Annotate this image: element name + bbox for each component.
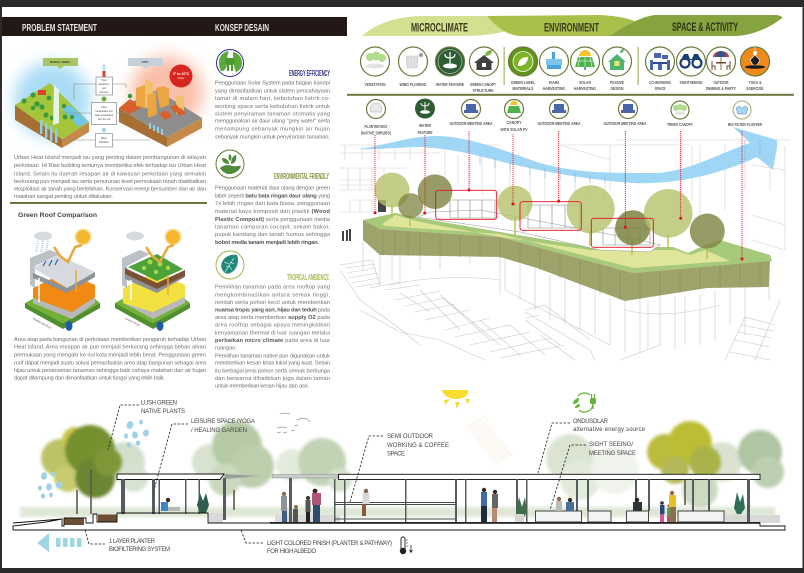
- icon: canopy solar: [504, 100, 524, 118]
- banner: environment: ENVIRONMENT: [544, 20, 599, 34]
- annotation labels: TREES CANOPY: [667, 122, 693, 127]
- text block: environmental friendly: Plastic Composit) serta penggunaan media: [215, 217, 331, 223]
- icon labels: DINNING & PARTY: [706, 86, 736, 91]
- illustration: traditional roof: [25, 230, 100, 331]
- red temperature badge: hotter: [178, 77, 184, 80]
- icon: planter box: [366, 100, 386, 118]
- text block: tropical ambience: area atap serta memberikan supply O2 pada: [215, 315, 331, 321]
- red temperature badge: 3° to 10°C: [173, 72, 190, 76]
- text block: green roof: dapat ditampung dan dimanfaatkan untuk fungsi yang lebih baik.: [14, 376, 165, 382]
- icon labels: YOGA &: [748, 80, 762, 85]
- process box: heat: [96, 77, 112, 95]
- city label: CITY: [142, 60, 148, 64]
- illustration: green roof: Green Roof: [125, 316, 140, 327]
- text block: environmental friendly: 7x lebih ringan dari bata biasa, penggunaan: [215, 201, 330, 207]
- process box: heat: and: [102, 88, 107, 90]
- label: lush green native plants: [141, 400, 185, 415]
- icon labels: [364, 80, 764, 93]
- perspective drawing: rooftop: [340, 127, 790, 360]
- text block: energy efficiency: sistem penyiraman tanaman otomatis yang: [215, 111, 330, 117]
- icon labels: CO-WORKING: [649, 80, 671, 85]
- banner: microclimate: [362, 16, 512, 36]
- label: ondusolar: alternative energy source: [573, 427, 646, 433]
- text block: energy efficiency: menampung sebanyak mungkin air hujan: [215, 126, 330, 132]
- icon: co-working space: [646, 47, 674, 76]
- roof facade: [363, 220, 770, 301]
- tree trunks: [77, 470, 685, 514]
- railing: [334, 502, 456, 519]
- text block: energy efficiency: tamar di malam hari, kebutuhan listrik co-: [215, 96, 330, 102]
- illustration: green roof: [115, 230, 190, 331]
- icon labels: GREEN LABEL: [511, 80, 535, 85]
- icon labels: VEGETATION: [364, 82, 386, 87]
- callout points: [374, 188, 744, 260]
- annotation labels: (NATIVE SHRUBS): [361, 130, 391, 136]
- icon labels: PASSIVE: [610, 80, 624, 85]
- rural label: [43, 58, 78, 69]
- icon labels: SIGHTSEEING: [680, 80, 703, 85]
- plaza seating linework: [340, 260, 780, 360]
- text block: tropical ambience: nuansa tropis yang asri, hijau dan teduh pada: [215, 307, 331, 313]
- process box: water: [96, 128, 112, 147]
- icon labels: MATERIALS: [512, 86, 534, 91]
- text block: energy efficiency: [214, 81, 331, 141]
- arrow: water flow: [37, 533, 82, 552]
- city towers: [136, 79, 186, 120]
- icon: big filter planter: [733, 101, 751, 119]
- icon labels: HARVESTING: [543, 86, 565, 91]
- icon: water feature: [415, 98, 435, 118]
- icon row: design features: [360, 47, 770, 85]
- text block: green roof: [14, 337, 207, 382]
- icon: outdoor meeting: [462, 100, 480, 118]
- icon: vegetation: [360, 47, 390, 76]
- text block: environmental friendly: bobot media tanam menjadi lebih ringan.: [215, 240, 319, 246]
- process diagram connectors: [60, 84, 150, 140]
- icon: energy efficiency: [216, 50, 244, 76]
- text block: urban heat island: Island. Selain itu daerah resapan air di kawasan perkotaan yang semakin: [14, 172, 206, 178]
- faded background trees: [105, 421, 784, 508]
- text block: urban heat island: eksploitasi air tanah yang berlebihan. Konservasi energi bersumber dari air dan: [14, 186, 206, 192]
- icon labels: SPACE: [654, 86, 666, 91]
- wind swirls: [43, 259, 58, 266]
- paving: [208, 513, 780, 523]
- text block: environmental friendly: Penggunaan material daur ulang dengan green: [215, 185, 330, 191]
- text block: tropical ambience: itu berbagai jenis pohon serta semak berbunga: [215, 369, 331, 375]
- thermometer: [102, 64, 106, 78]
- process box: heat: Heat: [102, 79, 107, 82]
- icon: passive design: [602, 47, 632, 76]
- icon: yoga and exercise: [740, 47, 770, 76]
- label: lush green native plants: LUSH GREEN: [141, 400, 177, 406]
- label: ondusolar: [573, 419, 646, 433]
- icon: outdoor meeting: [550, 100, 568, 118]
- header band: problem statement and konsep desain: [2, 17, 347, 36]
- text block: urban heat island: berkurang pun menjadi isu serta penurunan level permukaan tanah diakibatkan: [14, 179, 206, 185]
- text block: tropical ambience: untuk memberikan kesan hijau dan asri.: [215, 384, 309, 390]
- orange insulation: [33, 272, 95, 312]
- label: lush green native plants: NATIVE PLANTS: [141, 409, 185, 415]
- lower building linework: [363, 240, 769, 352]
- annotation labels: OUTDOOR MEETING AREA: [604, 121, 647, 126]
- text block: tropical ambience: area rooftop sebagai upaya meningkatkan: [215, 323, 330, 329]
- icon labels: EXERCISE: [746, 86, 764, 91]
- infographic page: TROPICAL AMBIENCE: [287, 273, 329, 282]
- icon: rain harvesting: [540, 47, 568, 76]
- annotation labels: CANOPY: [506, 120, 522, 125]
- icon labels: DESIGN: [610, 86, 624, 91]
- facade panel lines: [383, 230, 760, 300]
- label: sight seeing: SIGHT SEEING/: [589, 442, 633, 448]
- icon: renewable energy: [573, 393, 596, 412]
- roof inner planting: [382, 215, 730, 268]
- icon labels: WIND FLOWING: [400, 82, 427, 87]
- heading: environmental friendly: ENVIRONMENTAL FRIENDLY: [274, 172, 329, 181]
- foreground trees: [41, 421, 721, 498]
- banner: microclimate: MICROCLIMATE: [411, 20, 468, 34]
- text block: tropical ambience: mengkombinasikan antara semak tinggi,: [215, 292, 330, 298]
- label: sight seeing: MEETING SPACE: [589, 451, 636, 457]
- columns: [121, 478, 750, 523]
- process box: water: infiltration: [99, 141, 110, 144]
- label: light colored finish: LIGHT COLORED FINISH (PLANTER & PATHWAY): [267, 541, 392, 547]
- birds: [277, 413, 310, 433]
- icon labels: OUTDOOR: [714, 80, 729, 85]
- annotation labels: OUTDOOR MEETING AREA: [538, 121, 581, 126]
- label: light colored finish: [267, 541, 392, 555]
- benches: [536, 511, 724, 522]
- process box: plant: water evaporation: [95, 114, 114, 117]
- icon: wind flowing: [398, 47, 428, 76]
- text block: urban heat island: perkotaan. Hi Rise building tentunya membetika efek terhadap isu Urban Heat: [14, 163, 206, 169]
- red temperature badge: [170, 64, 192, 88]
- process box: plant: [92, 96, 116, 124]
- label: ondusolar: ONDUSOLAR: [573, 419, 609, 425]
- annotation labels: [361, 120, 762, 136]
- text block: green roof: roof dapat menjadi suatu solusi pemanfaatan area atap bangunan sebagai area: [14, 360, 207, 366]
- icon: thermometer: [400, 537, 412, 554]
- label: planter: BIOFILTERING SYSTEM: [109, 547, 170, 553]
- label: light colored finish: FOR HIGH ALBEDO: [267, 549, 316, 555]
- potted plants: [197, 492, 745, 522]
- icon: green canopy structure: [470, 47, 498, 76]
- label: sight seeing: [589, 442, 636, 457]
- separator: [638, 47, 639, 85]
- icon: environmental friendly: [216, 150, 244, 178]
- header band: problem statement and konsep desain: PROBLEM STATEMENT: [22, 23, 97, 34]
- sun: [442, 390, 470, 409]
- section drawing: rooftop garden: [13, 390, 785, 555]
- header band: problem statement and konsep desain: KONSEP DESAIN: [215, 23, 269, 34]
- label: semi outdoor: WORKING & COFFEE: [387, 443, 449, 449]
- text block: environmental friendly: [215, 185, 331, 246]
- people silhouettes: [342, 229, 351, 241]
- text block: energy efficiency: working space serta kebutuhan listrik untuk: [214, 104, 330, 110]
- text block: energy efficiency: sebanyak mungkin untuk penyiraman tanaman.: [215, 135, 330, 141]
- background building linework: [340, 140, 790, 250]
- text block: green roof: permukaan yang mengalir ke riul kota menjadi lebih berat. Penggunaan green: [14, 352, 206, 358]
- callout leader lines: [375, 131, 742, 259]
- label: leisure space: LEISURE SPACE /YOGA: [191, 419, 255, 425]
- red zone outlines: [436, 190, 653, 247]
- label: planter: 1 LAYER PLANTER: [109, 539, 156, 545]
- annotation labels: BIG FILTER PLANTER: [728, 122, 762, 127]
- text block: tropical ambience: memberikan kesan khas lokal yang kuat. Selain: [215, 361, 330, 367]
- illustration: urban heat island rural vs city: [14, 56, 203, 148]
- leader lines: [85, 405, 586, 544]
- sun: [76, 230, 90, 244]
- base: [25, 303, 100, 329]
- interior courtyard: [418, 210, 660, 252]
- banner: environment: [487, 15, 637, 36]
- text block: urban heat island: Urban Heat Island menjadi isu yang penting dalam pembangunan di wilayah: [14, 155, 206, 161]
- icon labels: WATER FEATURE: [436, 82, 464, 87]
- text block: environmental friendly: material kayu komposit dari plastik (Wood: [215, 209, 331, 215]
- annotation labels: OUTDOOR MEETING AREA: [450, 121, 493, 126]
- icon labels: STRUCTURE: [472, 88, 494, 93]
- icon: green label materials: [508, 47, 538, 76]
- banner: space and activity: SPACE & ACTIVITY: [672, 20, 738, 34]
- rural block: [15, 83, 89, 148]
- heading: green roof comparison: Green Roof Comparison: [18, 212, 97, 219]
- label: leisure space: [191, 419, 255, 434]
- text block: tropical ambience: dan berwarna dihadirkan juga dalam taman: [215, 376, 330, 382]
- icon labels: GREEN CANOPY: [470, 82, 496, 87]
- icon: outdoor meeting: [618, 100, 638, 118]
- rooflines: [117, 474, 760, 480]
- annotation labels: PLANTER BOX: [364, 124, 388, 129]
- text block: environmental friendly: tanaman campuran cocopit, sekam bakar,: [215, 224, 330, 230]
- text block: energy efficiency: menggunakan air daur ulang "grey water" serta: [215, 119, 331, 125]
- process box: heat: absorption: [99, 83, 110, 86]
- icon: trees canopy: [671, 101, 689, 119]
- process box: plant: Plant: [101, 106, 107, 109]
- icon labels: HARVESTING: [574, 86, 596, 91]
- floor slab: [13, 513, 785, 530]
- dark floor line: [270, 522, 760, 524]
- grey wall and roof: [30, 250, 60, 288]
- icon: water feature: [436, 47, 464, 76]
- grass strip: [20, 507, 775, 517]
- wind ribbon: [358, 127, 777, 183]
- text block: tropical ambience: kenyamanan thermal di luar ruangan melalui: [215, 330, 330, 336]
- banner: space and activity: [610, 15, 782, 36]
- roof top surface: [363, 213, 772, 273]
- city block: [119, 79, 202, 147]
- people: [161, 488, 676, 523]
- text block: tropical ambience: Pemilihan tanaman pada area rooftop yang: [215, 285, 330, 291]
- text block: green roof: Area atap pada bangunan di perkotaan memberikan pengaruh terhadap Urban: [14, 337, 206, 343]
- text block: green roof: hijau untuk penanaman tanaman sehingga baik cahaya matahari dan air hujan: [14, 368, 206, 374]
- trees canopy group: [374, 172, 725, 259]
- text block: environmental friendly: pupuk kandang dan tanah humus sehingga: [215, 232, 331, 238]
- text block: tropical ambience: rendah serta pohon kecil untuk memberikan: [215, 300, 330, 306]
- annotation labels: WATER: [419, 123, 432, 128]
- icon: outdoor dining and party: [706, 47, 736, 76]
- text block: urban heat island: matahari sangat penting untuk dilakukan.: [14, 194, 113, 200]
- text block: tropical ambience: Pemilihan tanaman native pun digunakan untuk: [215, 353, 330, 359]
- divider rule: [10, 202, 207, 204]
- separator: [504, 47, 505, 85]
- pergola linework: [450, 200, 650, 245]
- label: leisure space: / HEALING GARDEN: [191, 428, 247, 434]
- icon labels: SOLAR: [579, 80, 592, 85]
- water droplets: [38, 420, 150, 499]
- cloud: [34, 232, 52, 240]
- text block: energy efficiency: yang dimanfaatkan untuk sistem pencahayaan: [215, 89, 330, 95]
- illustration: traditional roof: Traditional Roof: [32, 316, 52, 330]
- sun rays: [466, 414, 512, 465]
- icon: solar harvesting: [570, 47, 600, 76]
- label: semi outdoor: SPACE: [387, 452, 405, 458]
- infographic page: ENERGY EFFICIENCY: [289, 69, 330, 78]
- text block: green roof: Heat Island. Area resapan air pun menjadi berkurang sehingga beban aliran: [14, 345, 206, 351]
- annotation labels: FEATURE: [418, 130, 432, 135]
- process box: plant: transpiration and: [95, 110, 113, 113]
- text block: tropical ambience: perbaikan micro climate pada area di luar: [215, 338, 330, 344]
- label: semi outdoor: SEMI OUTDOOR: [387, 434, 434, 440]
- icon: sightseeing: [676, 47, 706, 76]
- icon labels: RAIN: [549, 80, 560, 85]
- process box: water: Water: [101, 137, 107, 140]
- rural label: RURAL AREA: [50, 60, 71, 64]
- ribbon building overlay: [480, 140, 760, 184]
- label: planter: [109, 539, 170, 553]
- label: semi outdoor: [387, 434, 449, 458]
- city label: [128, 58, 163, 69]
- process box: heat: retention: [100, 91, 109, 94]
- text block: energy efficiency: Penggunaan Solar System pada bagian kanopi: [215, 81, 330, 87]
- process box: plant: from the soil: [98, 118, 111, 121]
- text block: environmental friendly: label seperti batu bata ringan daur ulang yang: [215, 194, 330, 200]
- icon: tropical ambience: [216, 251, 244, 279]
- divider rule: [347, 94, 794, 96]
- planters: [64, 514, 117, 525]
- text block: urban heat island: [14, 155, 206, 200]
- text block: tropical ambience: [215, 285, 331, 390]
- text block: tropical ambience: ruangan.: [215, 346, 237, 352]
- annotation labels: WITH SOLAR PV: [500, 127, 528, 132]
- icon row: plan annotations: [366, 98, 751, 119]
